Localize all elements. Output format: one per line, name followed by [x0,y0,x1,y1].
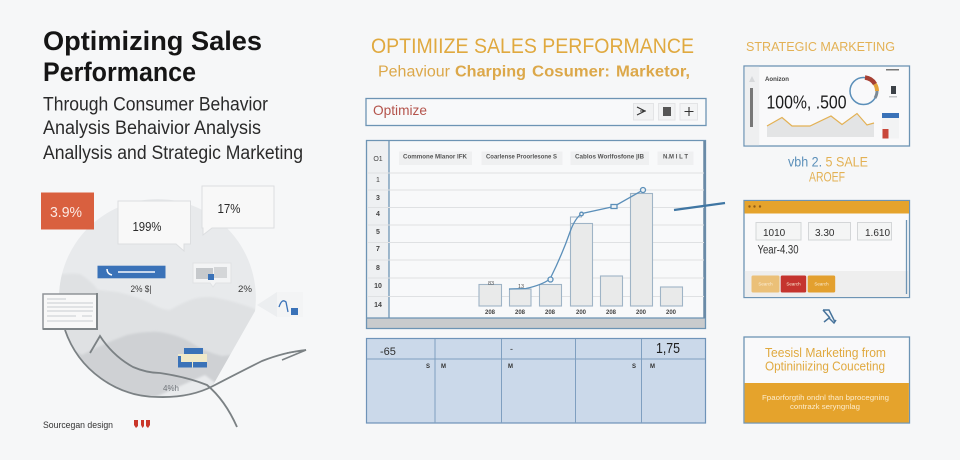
callout: 17%: 17% [218,202,240,216]
globe pin shape [59,199,256,396]
icon: shopping cart tag [257,292,303,317]
stat: 2% right: 2% [238,284,253,295]
dashboard headline number: 100%, .500 [766,92,846,112]
document card [43,293,97,329]
heading subtitle: Cosumer: [532,64,610,81]
bar year labels: 200 [666,310,677,316]
stat: 2% left: 2% $| [130,284,152,295]
heading subtitle: Marketor, [616,64,690,81]
metric values: 1010 [763,228,786,239]
panel: metrics window [744,200,910,298]
window footer with buttons: Search [758,282,773,286]
line series [509,188,646,289]
heading subtitle [378,64,690,81]
main title: Performance [43,57,196,87]
infographic canvas [41,30,910,430]
window footer with buttons [745,271,909,297]
dashboard label: Aonizon [765,76,789,83]
chart footer strip [367,318,705,328]
title block [43,26,303,164]
row labels: 5 [376,229,380,236]
main title [43,26,262,87]
row labels: 10 [374,283,382,290]
row labels: 14 [374,302,382,309]
grid lines [367,173,704,296]
scrollbar [906,220,908,294]
bars [479,194,682,306]
right heading: STRATEGIC MARKETING [746,39,895,54]
header chips [399,152,694,165]
header chips: Coarlense Proorlesone S [486,154,558,160]
callout: 17% [202,186,274,235]
table values: - [510,344,513,354]
bar year labels: 208 [485,310,496,316]
summary orange footer: Fpaorforgtih ondnl than bprocegning [762,395,889,402]
panel: consumer behavior illustration [41,186,306,431]
icon: small device [886,69,899,98]
main title: Optimizing Sales [43,26,262,56]
orange stat: 3.9% [41,192,94,230]
metric values [763,228,890,239]
arrow: chart to marketing panel [674,203,725,210]
bar top labels: 83 [488,281,494,287]
donut chart [850,78,877,104]
blue label bar [98,266,166,278]
summary orange footer: contrazk seryngnlag [790,404,860,411]
orange stat: 3.9%: 3.9% [50,204,82,221]
callout: 199% [118,201,190,251]
row labels: 3 [376,195,380,202]
bar top labels [488,281,524,290]
row labels: 7 [376,246,380,253]
metric values: 3.30 [815,228,835,239]
window footer with buttons: Search [786,282,801,286]
window title bar [744,201,909,214]
panel: optimize toolbar [366,98,706,126]
window footer with buttons: Search [814,282,829,286]
header chips: Cablos Worlfosfone |IB [575,154,644,160]
toolbar buttons [634,104,698,120]
subtitle: Analysis Behaivior Analysis [43,118,261,139]
callout: 199%: 199% [132,220,162,234]
source line: Sourcegan design [43,420,113,431]
subtitle: Anallysis and Strategic Marketing [43,143,303,164]
heading subtitle: Pehaviour [378,64,450,81]
summary heading [765,345,886,374]
summary heading: Optininiizing Couceting [765,358,885,374]
stat: 4% bottom: 4%h [163,383,179,393]
bar year labels: 200 [576,310,587,316]
panel: marketing summary [744,337,910,423]
panel: bar chart [366,140,706,328]
icon: zigzag arrows [823,310,836,323]
header chips: Commone Mlanor IFK [403,154,467,160]
row labels: O1 [373,156,383,163]
icon: blue store [178,348,207,368]
growth arrow curve [65,330,306,397]
row labels: 1 [376,177,380,184]
table column labels: S [632,364,636,370]
bar year labels: 208 [606,310,617,316]
summary heading: Teesisl Marketing from [765,345,886,360]
row labels: 8 [376,265,380,272]
decline curve [90,336,237,427]
stat caption: AROEF [809,168,845,184]
table column labels [426,364,655,370]
dashboard sidebar [745,67,759,145]
year label: Year-4.30 [758,244,798,256]
subtitle: Through Consumer Behavior [43,94,269,116]
bar top labels: 13 [518,284,524,290]
heading subtitle: Charping [455,64,526,81]
stat caption [788,154,868,184]
center heading [371,35,694,81]
table values: -65 [380,346,396,358]
panel: marketing dashboard [744,66,910,146]
table column labels: M [508,364,513,370]
metric values: 1.610 [865,228,890,239]
subtitle [43,94,303,164]
metric boxes [756,222,892,240]
small chart card [193,263,231,287]
bar year labels: 200 [636,310,647,316]
table values [380,340,680,358]
toolbar label: Optimize [373,102,427,118]
panel: data table [366,338,706,423]
header chips: N.M I L T [663,154,688,160]
bar year labels: 208 [545,310,556,316]
bar year labels: 208 [515,310,526,316]
icon: red marks [134,420,150,428]
stat caption: vbh 2. 5 SALE [788,154,868,170]
summary orange footer [745,383,909,422]
table column labels: M [441,364,446,370]
heading title: OPTIMIIZE SALES PERFORMANCE [371,35,694,58]
mini table [882,113,899,138]
table values: 1,75 [656,340,680,357]
dashboard area chart [767,114,874,137]
table column labels: M [650,364,655,370]
row labels [373,156,383,309]
table column labels: S [426,364,430,370]
bar year labels [485,310,677,316]
row labels: 4 [376,211,380,218]
